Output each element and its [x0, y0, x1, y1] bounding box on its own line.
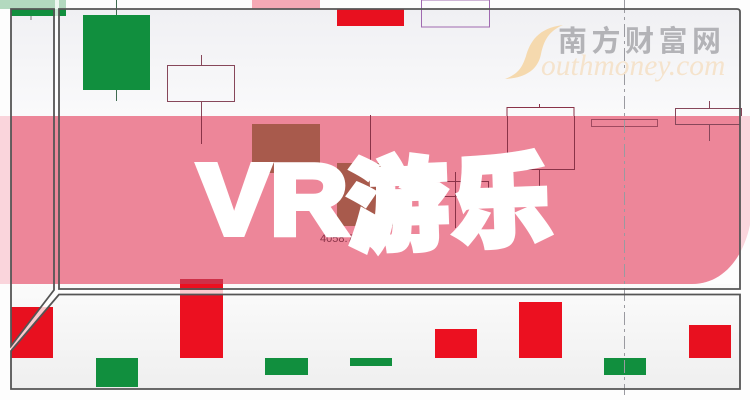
- candlestick chart: [0, 0, 742, 186]
- pink title band: [0, 115, 750, 284]
- dashed crosshair: [624, 0, 626, 395]
- watermark logo: [505, 25, 726, 82]
- logo swoosh: [505, 25, 563, 79]
- title chinese: 游乐: [345, 120, 558, 272]
- logo chinese name: 南方财富网: [558, 25, 726, 58]
- title: [198, 120, 558, 272]
- logo url: outhmoney.com: [541, 50, 725, 82]
- axis label: 4058.7: [320, 233, 354, 245]
- volume bars: [11, 279, 731, 387]
- title latin: VR: [198, 145, 348, 256]
